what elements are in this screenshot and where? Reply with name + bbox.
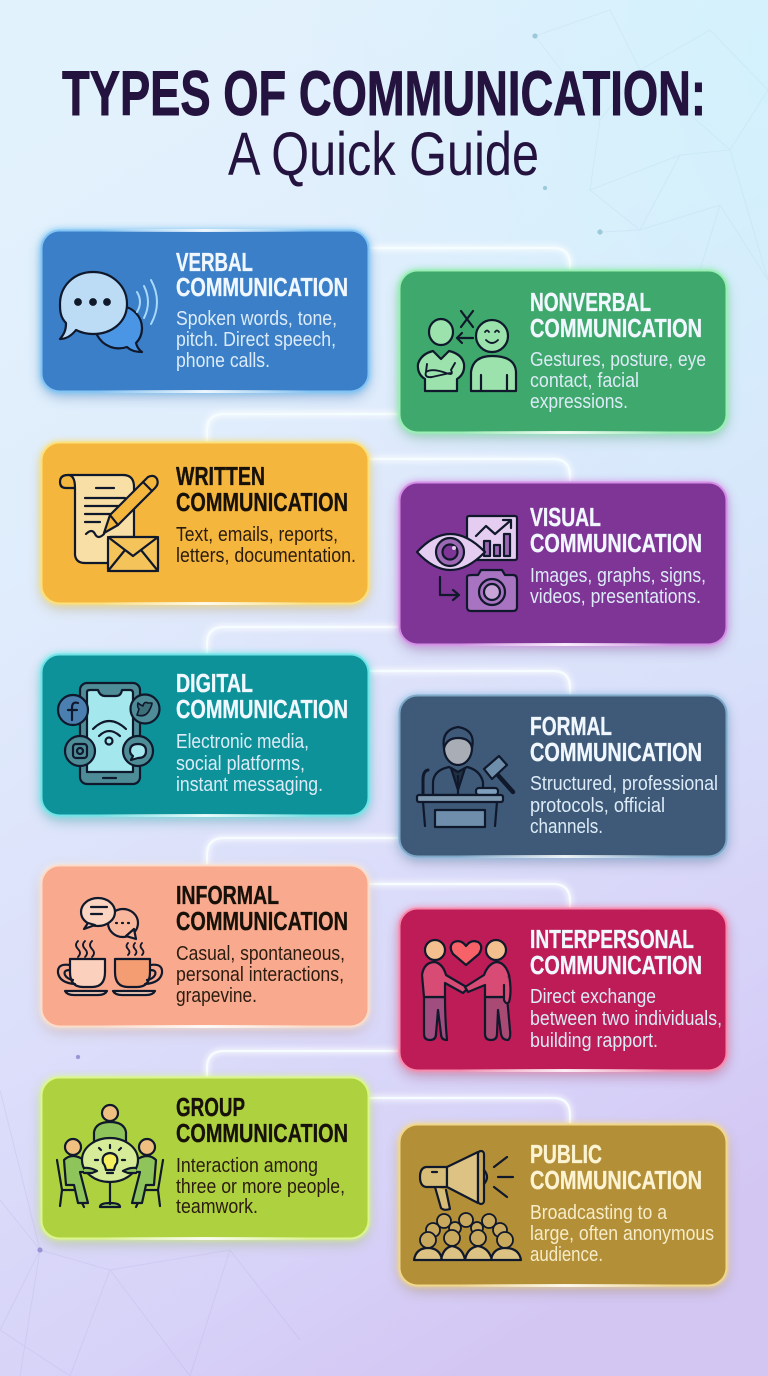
description: instant messaging. — [176, 774, 323, 796]
description: building rapport. — [530, 1030, 658, 1052]
description: channels. — [530, 816, 603, 838]
description: Broadcasting to a — [530, 1202, 668, 1224]
description: teamwork. — [176, 1196, 258, 1218]
description — [176, 943, 345, 1007]
description — [176, 308, 337, 372]
panel: nonverbal communication — [398, 269, 728, 437]
description: three or more people, — [176, 1176, 345, 1198]
description: contact, facial — [530, 370, 639, 392]
connectors — [207, 248, 570, 1123]
description — [530, 986, 722, 1052]
icon: handshake with heart — [422, 940, 510, 1040]
description — [176, 524, 356, 567]
description: audience. — [530, 1244, 603, 1266]
panel: public communication — [398, 1123, 728, 1290]
description: Spoken words, tone, — [176, 308, 337, 330]
heading: COMMUNICATION — [530, 530, 702, 558]
description: Electronic media, — [176, 731, 309, 753]
heading: COMMUNICATION — [176, 1120, 348, 1148]
description: Images, graphs, signs, — [530, 565, 706, 587]
icon: megaphone and audience — [414, 1151, 521, 1260]
description — [530, 349, 706, 413]
heading — [176, 670, 348, 724]
description: between two individuals, — [530, 1008, 722, 1030]
panel: verbal communication — [40, 229, 370, 396]
description: letters, documentation. — [176, 545, 356, 567]
title — [62, 59, 706, 188]
heading — [176, 1094, 348, 1148]
description: grapevine. — [176, 985, 257, 1007]
heading: COMMUNICATION — [530, 739, 702, 767]
description — [176, 1155, 345, 1218]
heading: PUBLIC — [530, 1141, 602, 1169]
description — [530, 1202, 714, 1266]
heading: COMMUNICATION — [530, 1167, 702, 1195]
icon: smartphone with social apps — [58, 683, 160, 784]
heading — [530, 713, 702, 767]
heading: WRITTEN — [176, 463, 265, 491]
heading — [530, 1141, 702, 1195]
heading — [530, 289, 702, 343]
description: Direct exchange — [530, 986, 656, 1008]
heading: NONVERBAL — [530, 289, 651, 317]
heading: COMMUNICATION — [176, 489, 348, 517]
heading: COMMUNICATION — [176, 908, 348, 936]
description: protocols, official — [530, 795, 665, 817]
description: social platforms, — [176, 753, 305, 775]
heading: FORMAL — [530, 713, 612, 741]
description: expressions. — [530, 391, 628, 413]
description: Structured, professional — [530, 773, 718, 795]
description: phone calls. — [176, 350, 270, 372]
icon: eye, chart and camera — [417, 516, 517, 611]
heading: VISUAL — [530, 504, 601, 532]
heading: INTERPERSONAL — [530, 926, 694, 954]
heading — [530, 926, 702, 980]
heading: COMMUNICATION — [176, 696, 348, 724]
heading — [176, 249, 348, 302]
panel: interpersonal communication — [398, 907, 728, 1075]
icon: document, pen and envelope — [60, 475, 158, 571]
description: pitch. Direct speech, — [176, 329, 336, 351]
description: large, often anonymous — [530, 1223, 714, 1245]
panel: written communication — [40, 441, 370, 608]
heading: COMMUNICATION — [530, 952, 702, 980]
heading — [530, 504, 702, 558]
icon: speech bubbles — [60, 272, 157, 352]
heading: COMMUNICATION — [176, 274, 348, 302]
heading: VERBAL — [176, 249, 253, 277]
icon: coffee cups and chat — [58, 898, 162, 995]
icon: team around table — [57, 1105, 163, 1207]
description — [530, 773, 718, 838]
description — [530, 565, 706, 608]
icon: speaker at podium with gavel — [417, 727, 513, 827]
description: personal interactions, — [176, 964, 344, 986]
description: Casual, spontaneous, — [176, 943, 345, 965]
description: videos, presentations. — [530, 586, 701, 608]
description: Text, emails, reports, — [176, 524, 338, 546]
panel: formal communication — [398, 694, 728, 861]
panel: informal communication — [40, 864, 370, 1031]
description — [176, 731, 323, 796]
heading — [176, 463, 348, 517]
heading: INFORMAL — [176, 882, 279, 910]
panel: visual communication — [398, 481, 728, 649]
heading: COMMUNICATION — [530, 315, 702, 343]
title: A Quick Guide — [228, 120, 539, 188]
heading: DIGITAL — [176, 670, 253, 698]
panel: group communication — [40, 1076, 370, 1243]
description: Interaction among — [176, 1155, 318, 1177]
panel: digital communication — [40, 653, 370, 820]
icon: two people — [418, 311, 516, 391]
heading: GROUP — [176, 1094, 245, 1122]
heading — [176, 882, 348, 936]
description: Gestures, posture, eye — [530, 349, 706, 371]
